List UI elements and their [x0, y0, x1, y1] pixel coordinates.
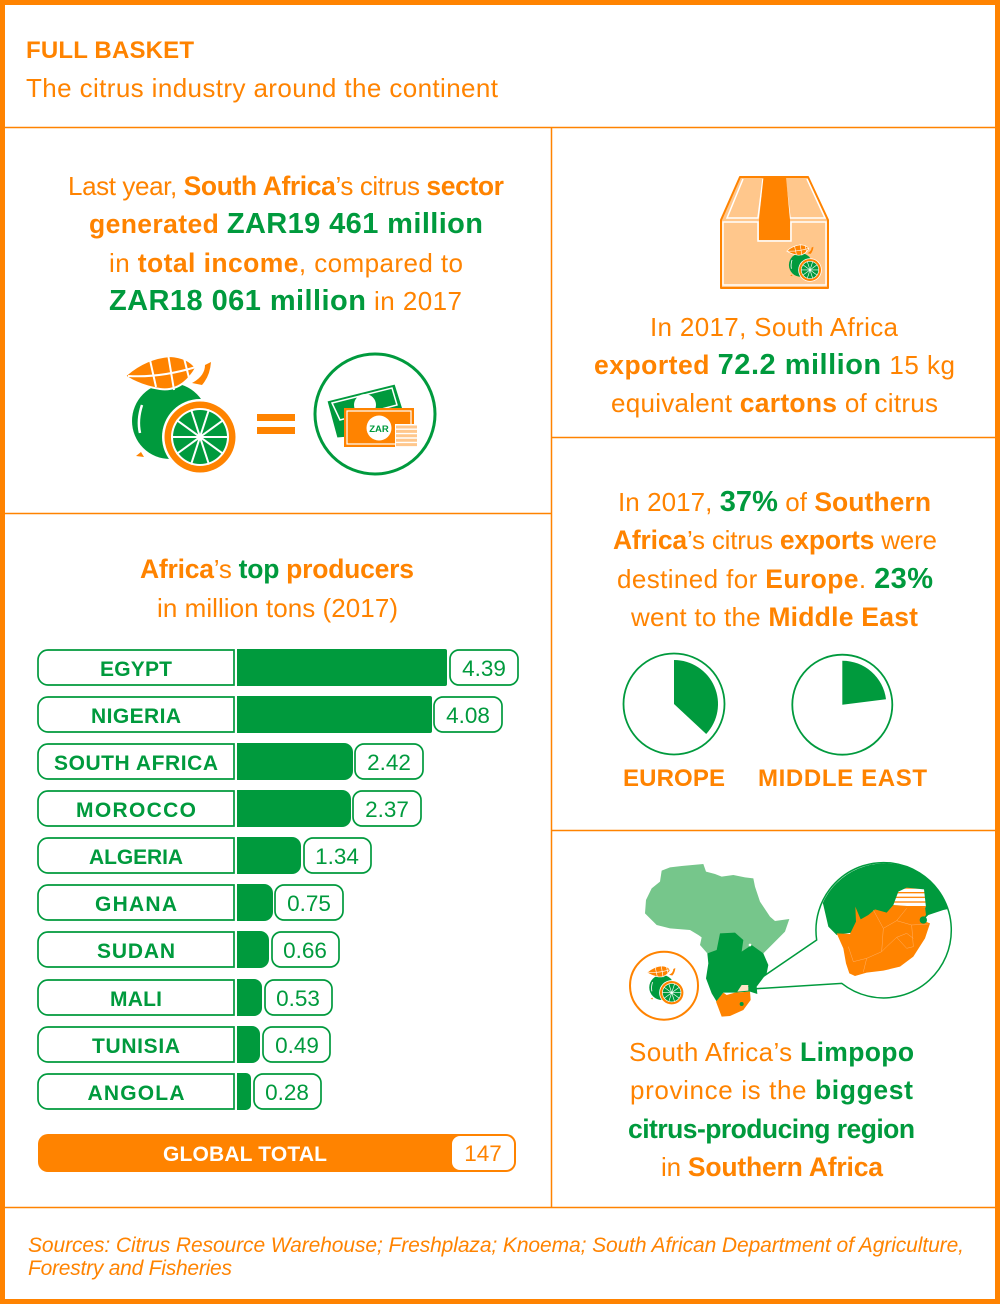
Southern Africa region — [706, 933, 768, 1002]
panel: destinations — [613, 486, 937, 792]
row: Morocco — [38, 790, 421, 827]
row: Tunisia: TUNISIA — [92, 1035, 180, 1058]
row: Ghana — [38, 884, 343, 921]
export statement: In 2017, South Africa — [650, 312, 899, 342]
sources note — [28, 1234, 964, 1280]
label: Europe: EUROPE — [623, 765, 725, 792]
row: Angola: ANGOLA — [88, 1082, 184, 1105]
row: Mali: 0.53 — [276, 986, 320, 1011]
export statement — [594, 312, 955, 418]
Limpopo statement: in Southern Africa — [661, 1152, 883, 1182]
bar chart — [38, 649, 518, 1172]
icon: money — [315, 354, 435, 474]
subtitle: The citrus industry around the continent — [26, 73, 499, 103]
Limpopo statement — [628, 1037, 915, 1182]
row: Ghana: 0.75 — [287, 891, 331, 916]
row: Morocco: MOROCCO — [76, 799, 196, 822]
icon: carton box — [721, 177, 828, 288]
row: Sudan: 0.66 — [283, 938, 327, 963]
row: South Africa: 2.42 — [367, 750, 411, 775]
export statement: equivalent cartons of citrus — [611, 388, 938, 418]
row: Sudan — [38, 931, 339, 968]
row: Sudan: SUDAN — [97, 940, 175, 963]
row: Egypt — [38, 649, 518, 686]
global total bar: GLOBAL TOTAL — [163, 1143, 327, 1166]
global total bar: 147 — [464, 1141, 502, 1166]
row: Tunisia: 0.49 — [275, 1033, 319, 1058]
row: Nigeria: 4.08 — [446, 703, 490, 728]
income statement: in total income, compared to — [109, 248, 463, 278]
South Africa — [716, 992, 751, 1017]
income statement: Last year, South Africa’s citrus sector — [68, 171, 504, 201]
destinations statement — [613, 486, 937, 632]
row: Algeria: ALGERIA — [89, 846, 183, 869]
zoom bubble — [748, 862, 952, 999]
row: South Africa: SOUTH AFRICA — [54, 752, 218, 775]
income statement: generated ZAR19 461 million — [89, 208, 483, 240]
map of Africa with zoomed South Africa — [645, 850, 960, 1017]
row: Mali: MALI — [110, 988, 162, 1011]
destinations statement: destined for Europe. 23% — [617, 563, 933, 595]
destinations statement: Africa’s citrus exports were — [613, 525, 937, 555]
row: Algeria — [38, 837, 371, 874]
row: Egypt: 4.39 — [462, 656, 506, 681]
chart heading: Africa’s top producers — [140, 554, 414, 584]
row: Angola: 0.28 — [265, 1080, 309, 1105]
chart heading — [140, 554, 414, 623]
Limpopo statement: South Africa’s Limpopo — [629, 1037, 914, 1067]
global total bar — [38, 1134, 516, 1172]
title: FULL BASKET — [26, 37, 194, 64]
row: Ghana: GHANA — [95, 893, 177, 916]
icon: equals sign — [257, 414, 295, 434]
pie: Europe 37% — [624, 654, 724, 754]
pie: Middle East 23% — [792, 655, 892, 755]
panel: income — [68, 171, 504, 475]
row: Nigeria: NIGERIA — [91, 705, 181, 728]
row: South Africa — [38, 743, 423, 780]
panel: Limpopo — [628, 850, 960, 1182]
icon: citrus fruit — [125, 354, 238, 475]
row: Tunisia — [38, 1026, 330, 1063]
sources note: Forestry and Fisheries — [28, 1257, 232, 1280]
row: Algeria: 1.34 — [315, 844, 359, 869]
row: Egypt: EGYPT — [100, 658, 172, 681]
Africa silhouette — [645, 864, 789, 960]
panel: top producers — [38, 554, 518, 1172]
row: Angola — [38, 1073, 321, 1110]
icon: citrus in circle — [630, 952, 698, 1020]
icon: money: ZAR — [369, 424, 389, 435]
header — [26, 37, 499, 103]
panel: exports — [594, 177, 955, 418]
chart heading: in million tons (2017) — [157, 593, 398, 623]
label: Middle East: MIDDLE EAST — [758, 765, 927, 792]
export statement: exported 72.2 million 15 kg — [594, 349, 955, 381]
row: Nigeria — [38, 696, 502, 733]
Limpopo statement: province is the biggest — [630, 1075, 913, 1105]
destinations statement: went to the Middle East — [630, 602, 918, 632]
Limpopo statement: citrus-producing region — [628, 1114, 915, 1144]
row: Mali — [38, 979, 332, 1016]
income statement: ZAR18 061 million in 2017 — [109, 285, 462, 317]
sources note: Sources: Citrus Resource Warehouse; Freshplaza; Knoema; South African Department of Agriculture, — [28, 1234, 964, 1257]
destinations statement: In 2017, 37% of Southern — [618, 486, 931, 518]
income statement — [68, 171, 504, 317]
row: Morocco: 2.37 — [365, 797, 409, 822]
